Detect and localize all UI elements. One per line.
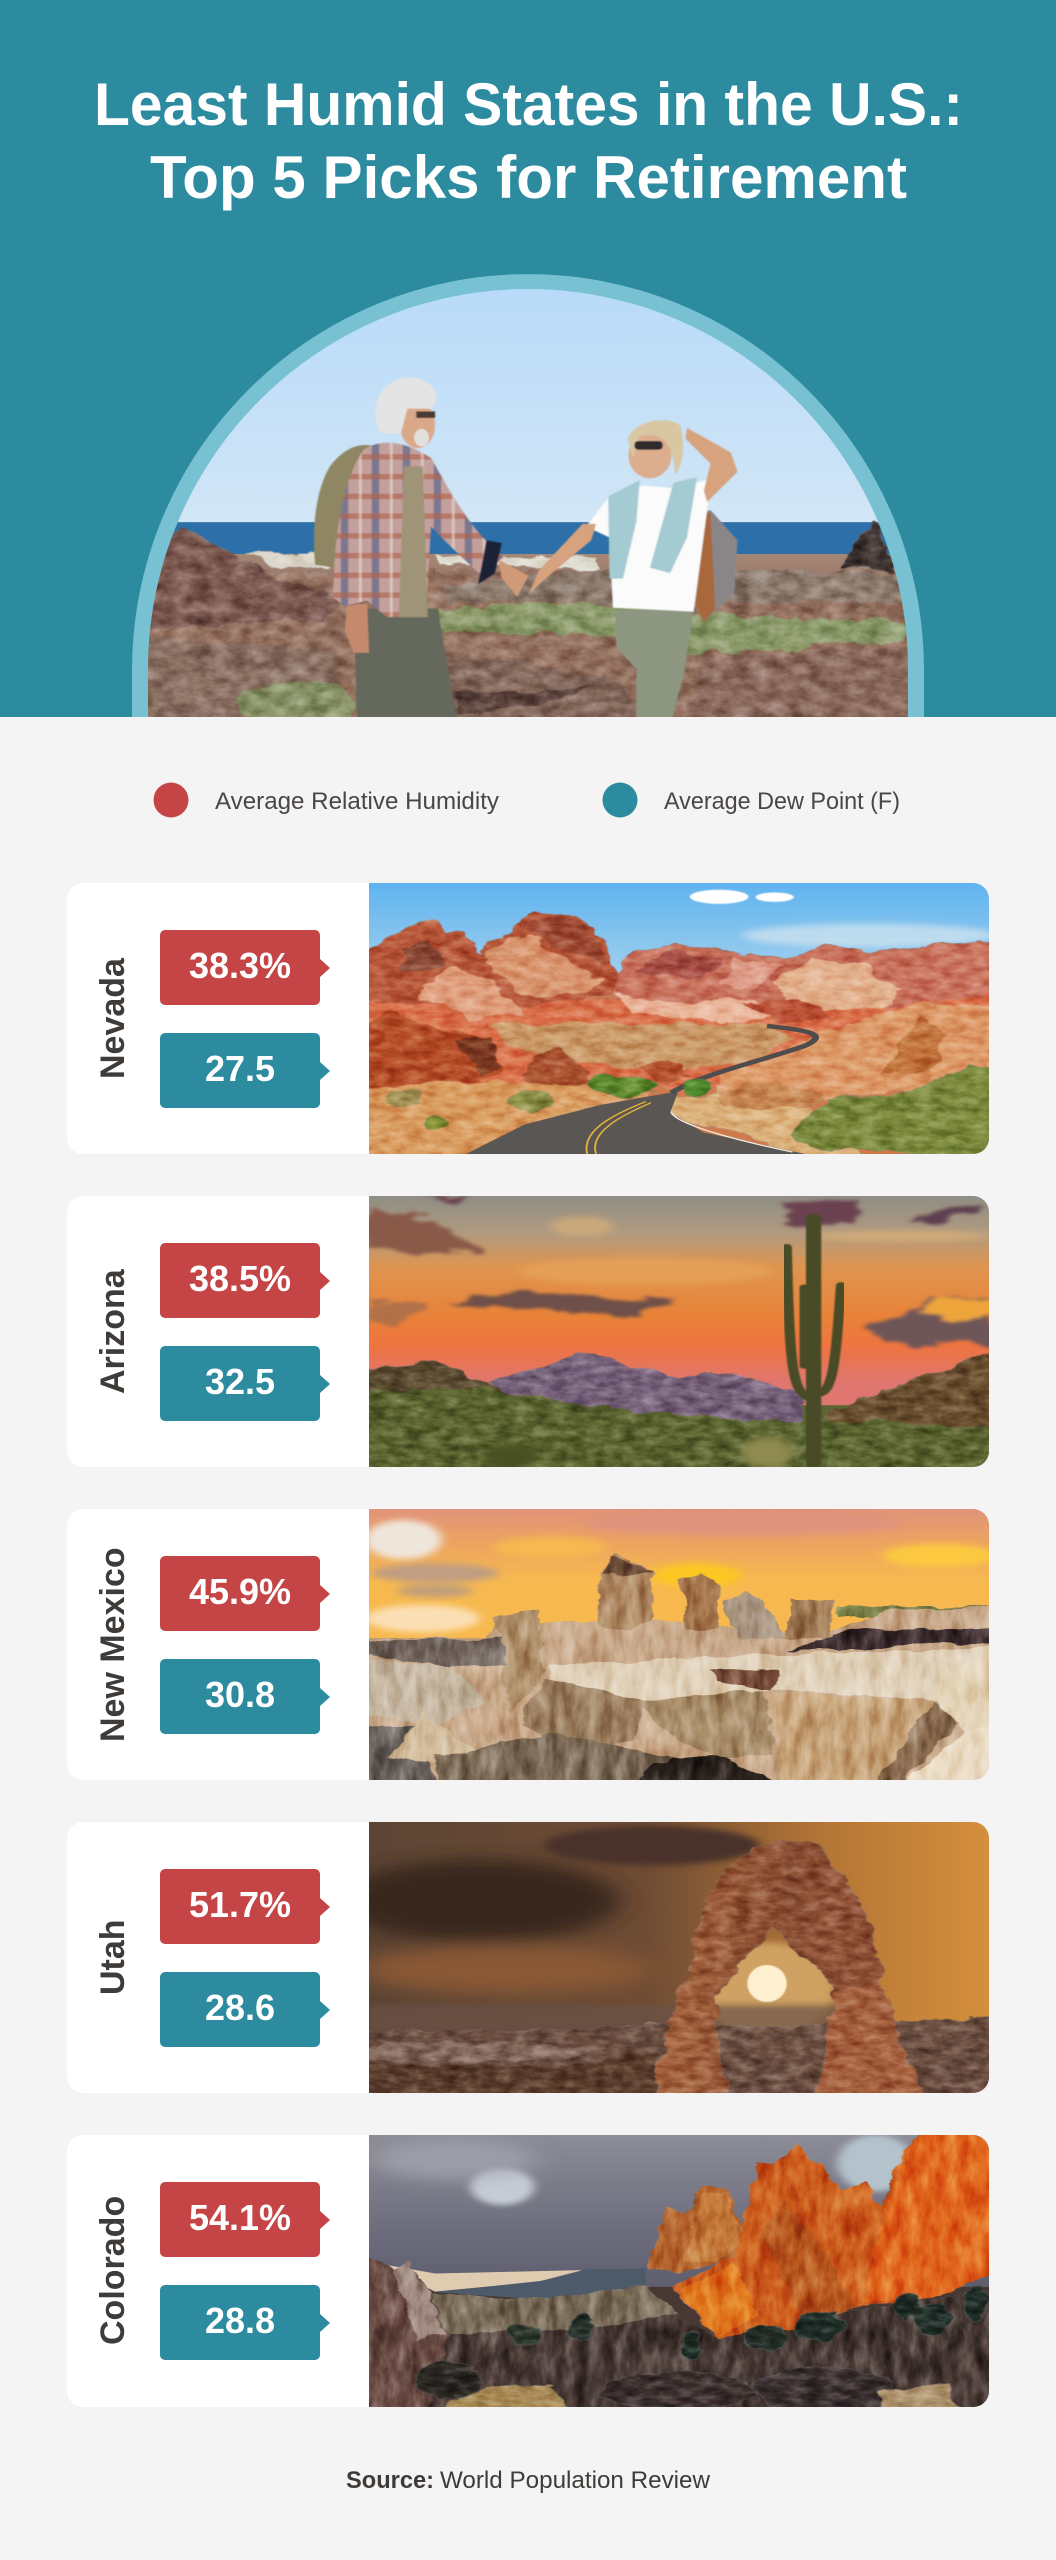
man: [314, 377, 529, 719]
source note: World Population Review: [440, 2467, 711, 2494]
arch: [652, 1841, 923, 2098]
state name: Utah: Utah: [94, 1920, 132, 1995]
arch ring: [132, 274, 924, 717]
humidity badge: 38.5%: [189, 1258, 291, 1299]
dew point badge: 28.8: [205, 2300, 275, 2341]
dew point badge: [160, 1346, 320, 1421]
humidity badge: 38.3%: [189, 945, 291, 986]
humidity badge: 51.7%: [189, 1884, 291, 1925]
photo: Arizona saguaro at sunset: [369, 1196, 989, 1467]
panel: Arizona: [67, 1196, 989, 1467]
panel: Colorado: [67, 2135, 989, 2407]
title: [94, 71, 963, 211]
header band: [0, 0, 1056, 717]
saguaro: [787, 1218, 841, 1464]
humidity badge: 54.1%: [189, 2197, 291, 2238]
photo: Nevada desert road: [369, 883, 989, 1154]
state name: Colorado: Colorado: [94, 2196, 132, 2345]
state name: Nevada: Nevada: [94, 958, 132, 1079]
dew point badge: 27.5: [205, 1048, 275, 1089]
panel: New Mexico: [67, 1509, 989, 1780]
title: Top 5 Picks for Retirement: [150, 144, 907, 211]
legend item: average relative humidity: Average Relative Humidity: [215, 788, 499, 815]
legend item: average relative humidity: [154, 782, 499, 818]
legend item: average dew point: [602, 782, 900, 818]
panel: Utah: [67, 1822, 989, 2093]
humidity badge: [160, 2182, 320, 2257]
dew point badge: [160, 1033, 320, 1108]
humidity badge: [160, 930, 320, 1005]
legend item: average dew point: Average Dew Point (F): [664, 788, 900, 815]
state name: Arizona: Arizona: [94, 1269, 132, 1394]
dew point badge: 32.5: [205, 1361, 275, 1402]
photo: Colorado red rock spires: [369, 2135, 989, 2407]
legend: [154, 782, 900, 818]
dew point badge: 30.8: [205, 1674, 275, 1715]
dew point badge: [160, 1972, 320, 2047]
photo: New Mexico badlands hoodoos: [369, 1509, 989, 1780]
title: Least Humid States in the U.S.:: [94, 71, 963, 138]
photo: Utah Delicate Arch: [369, 1822, 989, 2093]
woman: [529, 420, 737, 719]
humidity badge: [160, 1869, 320, 1944]
dew point badge: [160, 2285, 320, 2360]
humidity badge: 45.9%: [189, 1571, 291, 1612]
panel: Nevada: [67, 883, 989, 1154]
dew point badge: [160, 1659, 320, 1734]
state name: New Mexico: New Mexico: [94, 1547, 132, 1742]
humidity badge: [160, 1556, 320, 1631]
hero photo: retired couple hiking, in arch frame: [132, 274, 924, 717]
dew point badge: 28.6: [205, 1987, 275, 2028]
source note: Source:: [346, 2467, 434, 2494]
humidity badge: [160, 1243, 320, 1318]
